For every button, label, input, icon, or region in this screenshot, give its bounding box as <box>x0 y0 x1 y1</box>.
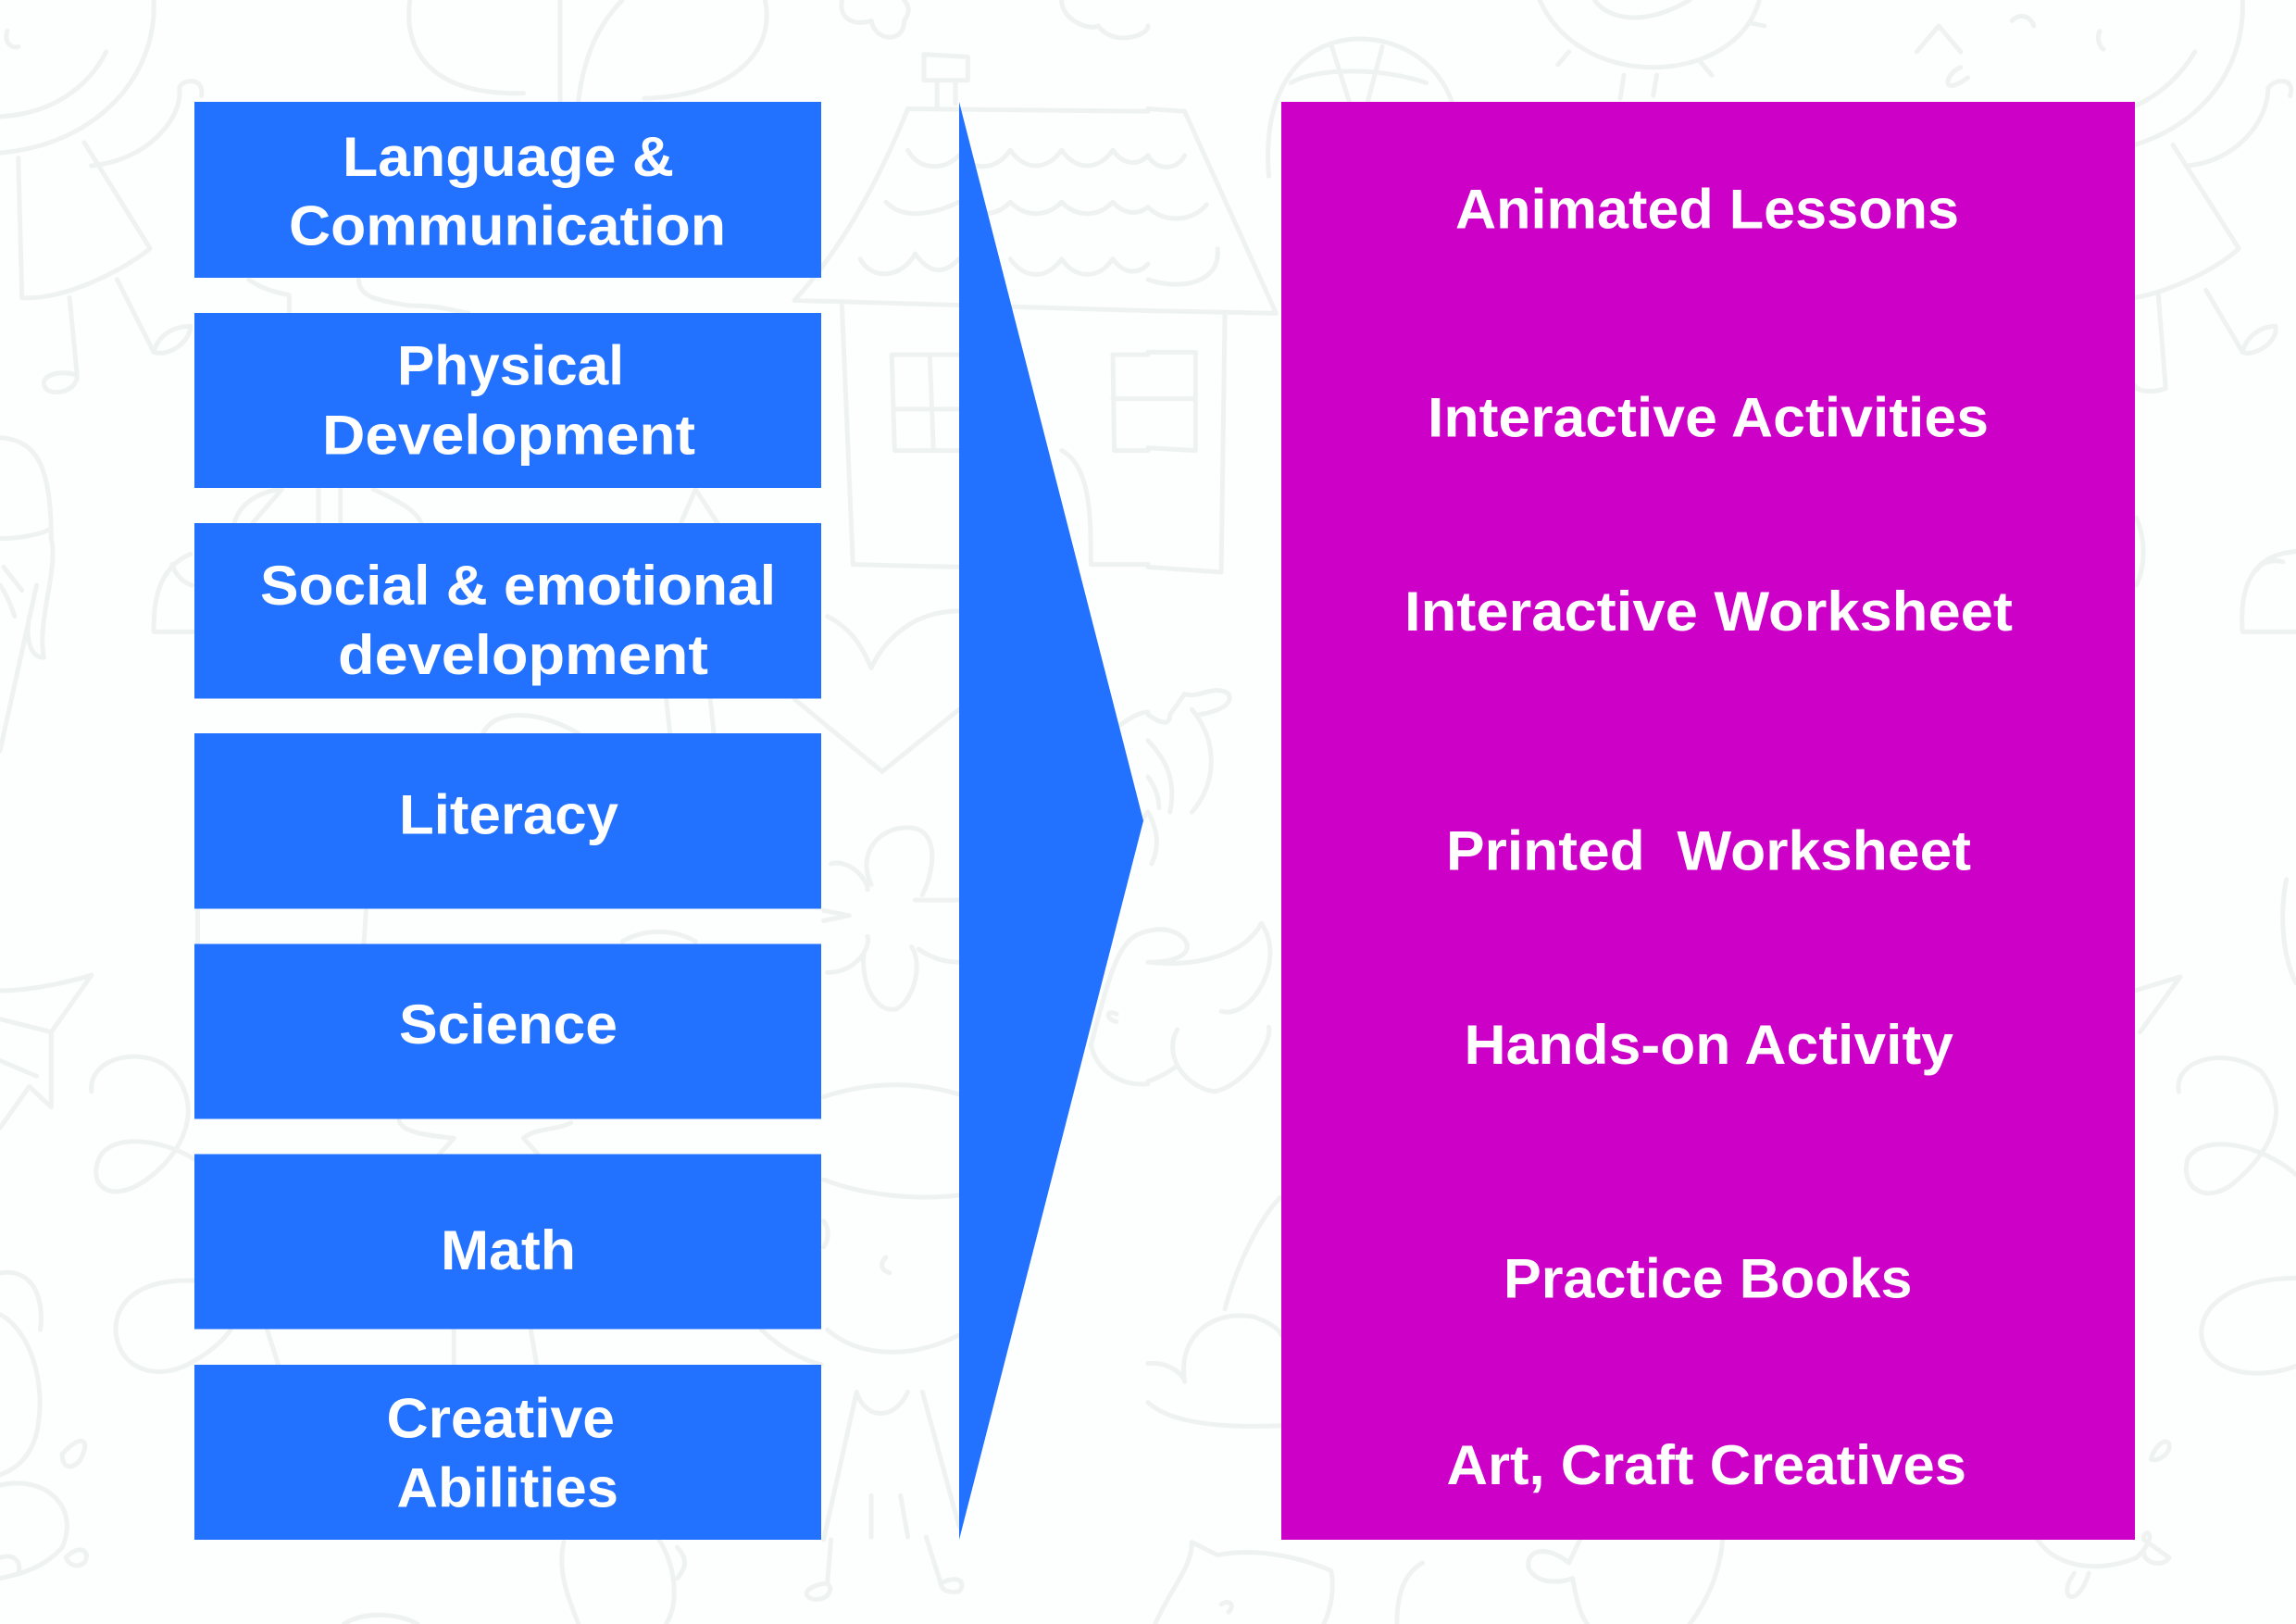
box: Social & emotional development: Social & emotional <box>260 555 776 617</box>
box: Math <box>194 1154 821 1330</box>
box: Science: Science <box>399 993 618 1056</box>
box: Language & Communication: Communication <box>289 194 726 257</box>
box: Physical Development <box>194 313 821 488</box>
box: Physical Development: Physical <box>397 335 624 396</box>
box: Social & emotional development: development <box>338 624 708 686</box>
box: Creative Abilities: Creative <box>387 1387 615 1450</box>
item: Interactive Worksheet: Interactive Worksheet <box>1404 581 2013 643</box>
panel: learning formats <box>1281 102 2135 1540</box>
box: Creative Abilities <box>194 1365 821 1540</box>
box: Math: Math <box>441 1219 576 1281</box>
box: Physical Development: Development <box>322 404 695 467</box>
item: Printed Worksheet: Printed Worksheet <box>1446 820 1971 881</box>
box: Literacy: Literacy <box>399 783 619 846</box>
box: Language & Communication <box>194 102 821 278</box>
box: Creative Abilities: Abilities <box>396 1457 618 1518</box>
panel: learning areas <box>194 102 821 1540</box>
item: Hands-on Activity: Hands-on Activity <box>1465 1014 1954 1076</box>
box: Language & Communication: Language & <box>343 126 674 188</box>
item: Art, Craft Creatives: Art, Craft Creatives <box>1446 1434 1966 1496</box>
arrow: triangle pointing right <box>959 102 1143 1540</box>
box: Science <box>194 944 821 1118</box>
item: Interactive Activities: Interactive Activities <box>1428 387 1989 448</box>
box: Social & emotional development <box>194 523 821 698</box>
box: Literacy <box>194 733 821 909</box>
item: Animated Lessons: Animated Lessons <box>1455 178 1959 241</box>
item: Practice Books: Practice Books <box>1504 1248 1913 1309</box>
